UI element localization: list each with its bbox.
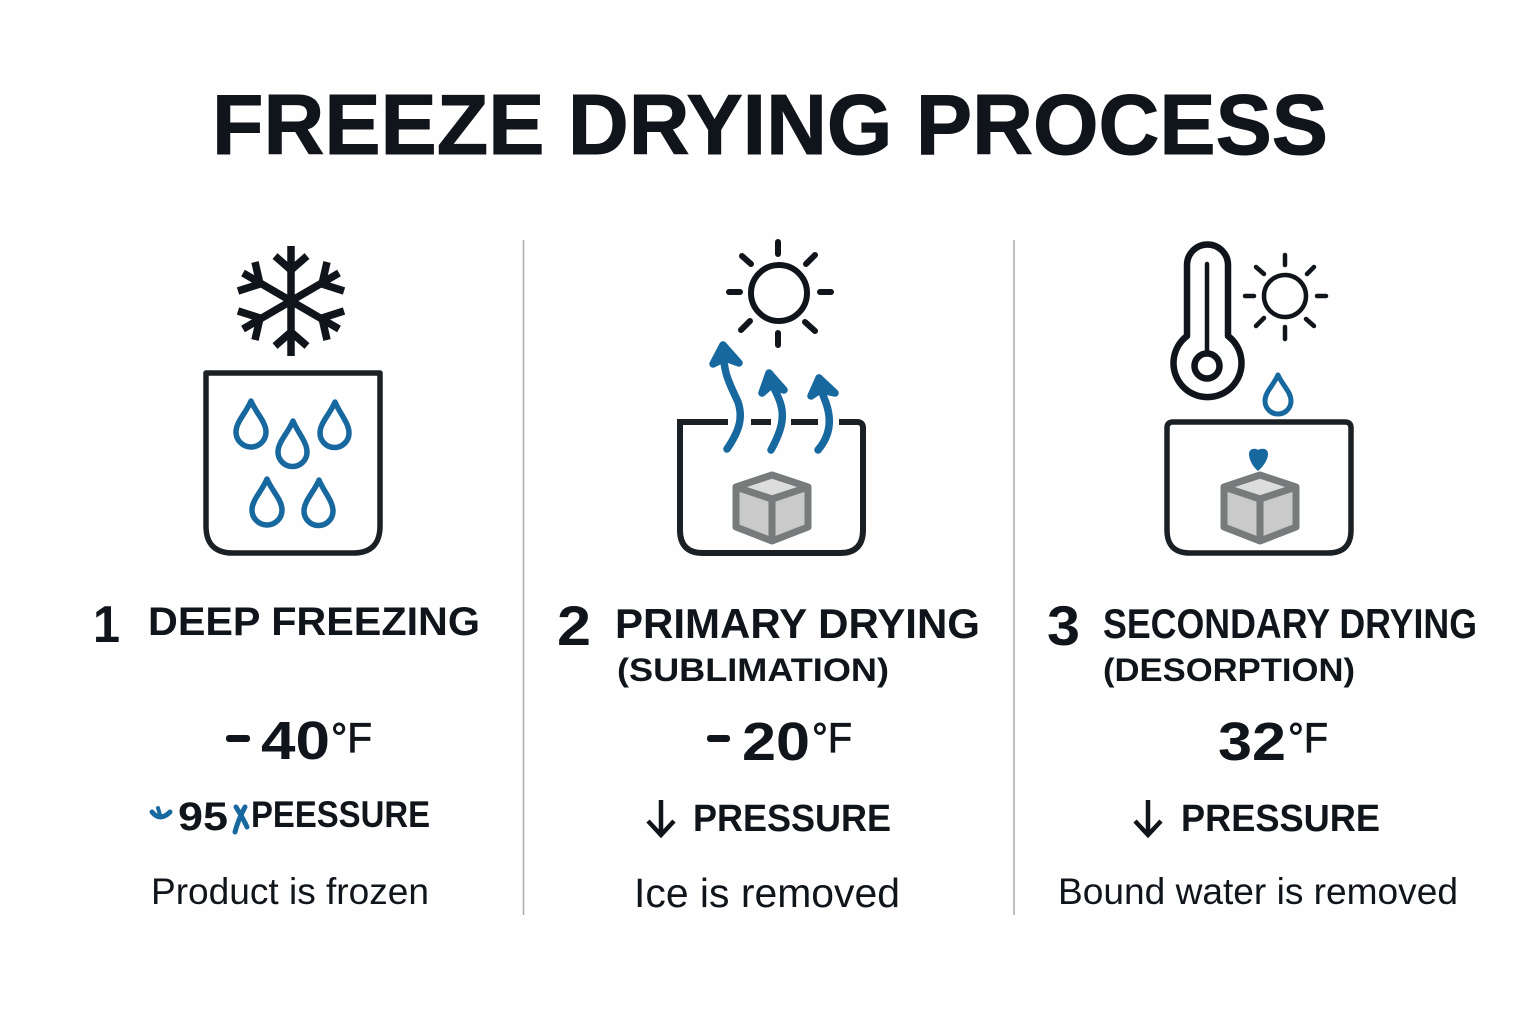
subheading: sublimation: (SUBLIMATION): [617, 652, 889, 688]
icon: container with water drops: [206, 373, 380, 553]
heading: primary drying: PRIMARY DRYING: [615, 600, 980, 647]
step number 3: 3: [1047, 594, 1080, 657]
heading: secondary drying: SECONDARY DRYING: [1103, 600, 1477, 647]
temperature -40°F: °F: [331, 714, 372, 761]
description: Product is frozen: [151, 871, 429, 912]
temperature -20°F: [707, 712, 852, 772]
temperature -40°F: [226, 711, 372, 771]
icon: snowflake: [238, 246, 344, 356]
step number 1: 1: [93, 596, 120, 654]
temperature 32°F: °F: [1288, 714, 1328, 761]
description: Bound water is removed: [1058, 871, 1458, 912]
subheading: desorption: (DESORPTION): [1103, 652, 1355, 688]
temperature -40°F: 40: [261, 711, 330, 771]
pressure: garbled 95 pressure: PEESSURE: [251, 794, 430, 835]
pressure down: PRESSURE: [693, 798, 891, 840]
pressure: garbled 95 pressure: 95: [178, 795, 228, 839]
temperature 32°F: 32: [1218, 712, 1286, 772]
panel: step 2 primary drying: [557, 242, 980, 916]
icon: small droplet: [1249, 449, 1268, 471]
icon: rising vapour arrows: [713, 345, 835, 450]
pressure down: PRESSURE: [1181, 798, 1380, 840]
title: FREEZE DRYING PROCESS: [212, 78, 1328, 173]
icon: open container with ice cube: [680, 422, 863, 553]
icon: ice cube: [736, 475, 808, 541]
icon: small sun: [1245, 255, 1326, 339]
icon: ice cube: [1224, 475, 1296, 541]
temperature -20°F: °F: [812, 714, 852, 761]
icon: sun: [729, 242, 831, 345]
icon: container with ice cube: [1167, 422, 1351, 553]
temperature 32°F: [1218, 712, 1328, 772]
panel: step 3 secondary drying: [1047, 244, 1477, 912]
pressure: garbled 95 pressure: [152, 794, 430, 839]
temperature -20°F: 20: [742, 712, 810, 772]
description: Ice is removed: [634, 870, 900, 916]
heading: deep freezing: DEEP FREEZING: [148, 600, 480, 644]
icon: water drop: [1265, 375, 1291, 414]
panel: step 1 deep freezing: [93, 246, 480, 912]
step number 2: 2: [557, 594, 591, 657]
icon: thermometer: [1174, 244, 1242, 397]
